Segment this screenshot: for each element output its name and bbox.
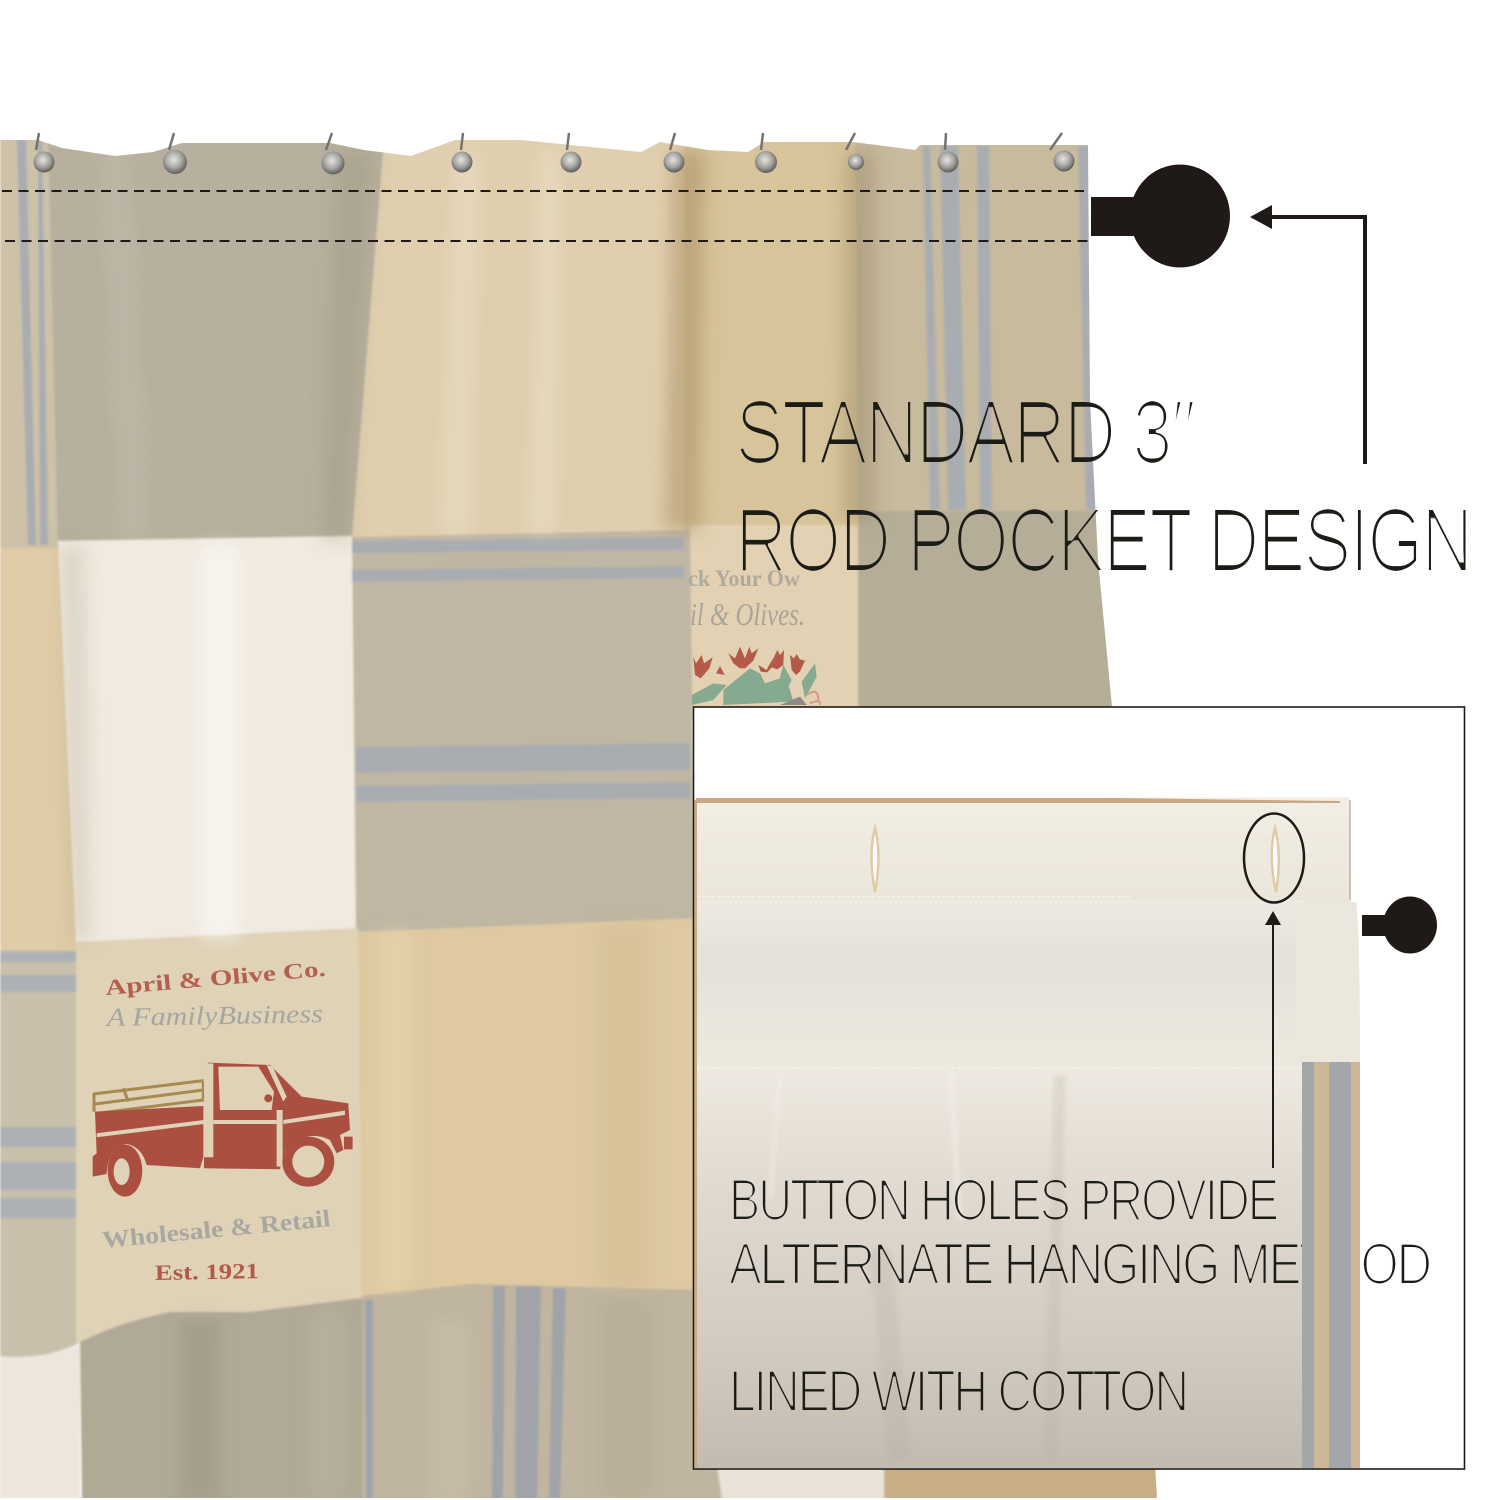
stripes: bottom vertical	[365, 1286, 566, 1500]
panel: left tan block middle	[0, 548, 80, 953]
callout: ellipse around button hole	[1244, 814, 1304, 902]
panel: patchwork shower curtain	[0, 130, 1164, 1500]
panel: bottom tan block	[882, 1470, 1157, 1498]
arrow: to rod	[1250, 205, 1365, 464]
panel: bottom left white	[0, 1345, 80, 1500]
text: fruit and olives: il & Olives.	[690, 596, 805, 632]
icon: button hole 2	[1272, 828, 1279, 892]
panel: yellow tan block	[355, 918, 700, 1300]
text: button holes and lining	[729, 1168, 1431, 1424]
fabric: rod pocket fold	[1296, 902, 1360, 1066]
fabric: tan seam	[696, 798, 1340, 803]
truck details	[97, 1063, 345, 1167]
flower block print	[688, 566, 820, 705]
panel: top grey block	[48, 130, 385, 548]
icon: flower bouquet	[692, 647, 820, 705]
panel: truck block	[76, 928, 362, 1345]
stripes: top right vertical	[923, 146, 1098, 510]
icon: silver grommets	[34, 150, 1074, 174]
panel: top tan block	[684, 130, 860, 530]
panel: grey striped block	[352, 530, 695, 932]
text: est 1921: Est. 1921	[155, 1258, 259, 1285]
panel: inset detail	[694, 707, 1464, 1469]
truck wheels	[108, 1137, 353, 1197]
text: button holes and lining: BUTTON HOLES PROVIDE	[729, 1168, 1278, 1233]
fabric: tan left edge	[694, 800, 698, 1468]
stripes: lower left horizontal	[0, 952, 76, 1218]
truck bed stripes	[93, 1081, 203, 1113]
text: button holes and lining: LINED WITH COTTON	[729, 1359, 1187, 1424]
icon: button hole 1	[872, 828, 878, 892]
text: april and olive co: April & Olive Co.	[104, 956, 327, 1000]
tulips	[693, 647, 805, 678]
stripes: horizontal middle	[352, 537, 690, 802]
fabric: striped edge	[1302, 1062, 1360, 1468]
truck print	[93, 956, 353, 1285]
panel: bottom striped block	[362, 1284, 722, 1500]
heading: standard 3 inch rod pocket design: STANDARD 3″	[735, 383, 1196, 483]
text: wholesale and retail: Wholesale & Retail	[101, 1206, 332, 1254]
pot	[780, 697, 807, 705]
panel: top cream block	[352, 130, 690, 545]
arrow: to button hole	[1265, 911, 1281, 1168]
icon: small rod and finial	[1362, 896, 1437, 954]
rod pocket dashed lines	[2, 191, 1088, 241]
text: a family business: A FamilyBusiness	[104, 999, 323, 1032]
icon: curtain rod and finial	[1091, 164, 1230, 268]
panel: top right striped block	[855, 142, 1096, 512]
heading: standard 3 inch rod pocket design	[735, 383, 1471, 591]
fabric: lower lining	[697, 1064, 1304, 1468]
panel: right grey block	[856, 511, 1112, 706]
text: pick your own: ck Your Ow	[688, 566, 800, 591]
fabric folds	[60, 150, 875, 1500]
fabric: top hem	[697, 797, 1351, 902]
stitching lines	[697, 897, 1304, 1068]
panel: top left tan strip	[0, 130, 60, 560]
panel: flower block	[690, 525, 858, 720]
leaves	[692, 663, 817, 705]
panel: white block	[58, 536, 356, 945]
panel: bottom grey block	[80, 1298, 362, 1500]
icon: red pickup truck	[93, 1063, 353, 1197]
truck cab	[204, 1063, 350, 1169]
stripes: top left vertical	[17, 140, 48, 545]
panel: bottom cream block	[716, 1470, 884, 1498]
fabric wrinkles	[770, 1070, 1060, 1460]
panel: lower left striped block	[0, 950, 76, 1358]
fabric: middle lining	[697, 900, 1304, 1066]
icon: curtain hooks above fabric	[36, 133, 1062, 150]
truck rear body	[93, 1106, 203, 1177]
